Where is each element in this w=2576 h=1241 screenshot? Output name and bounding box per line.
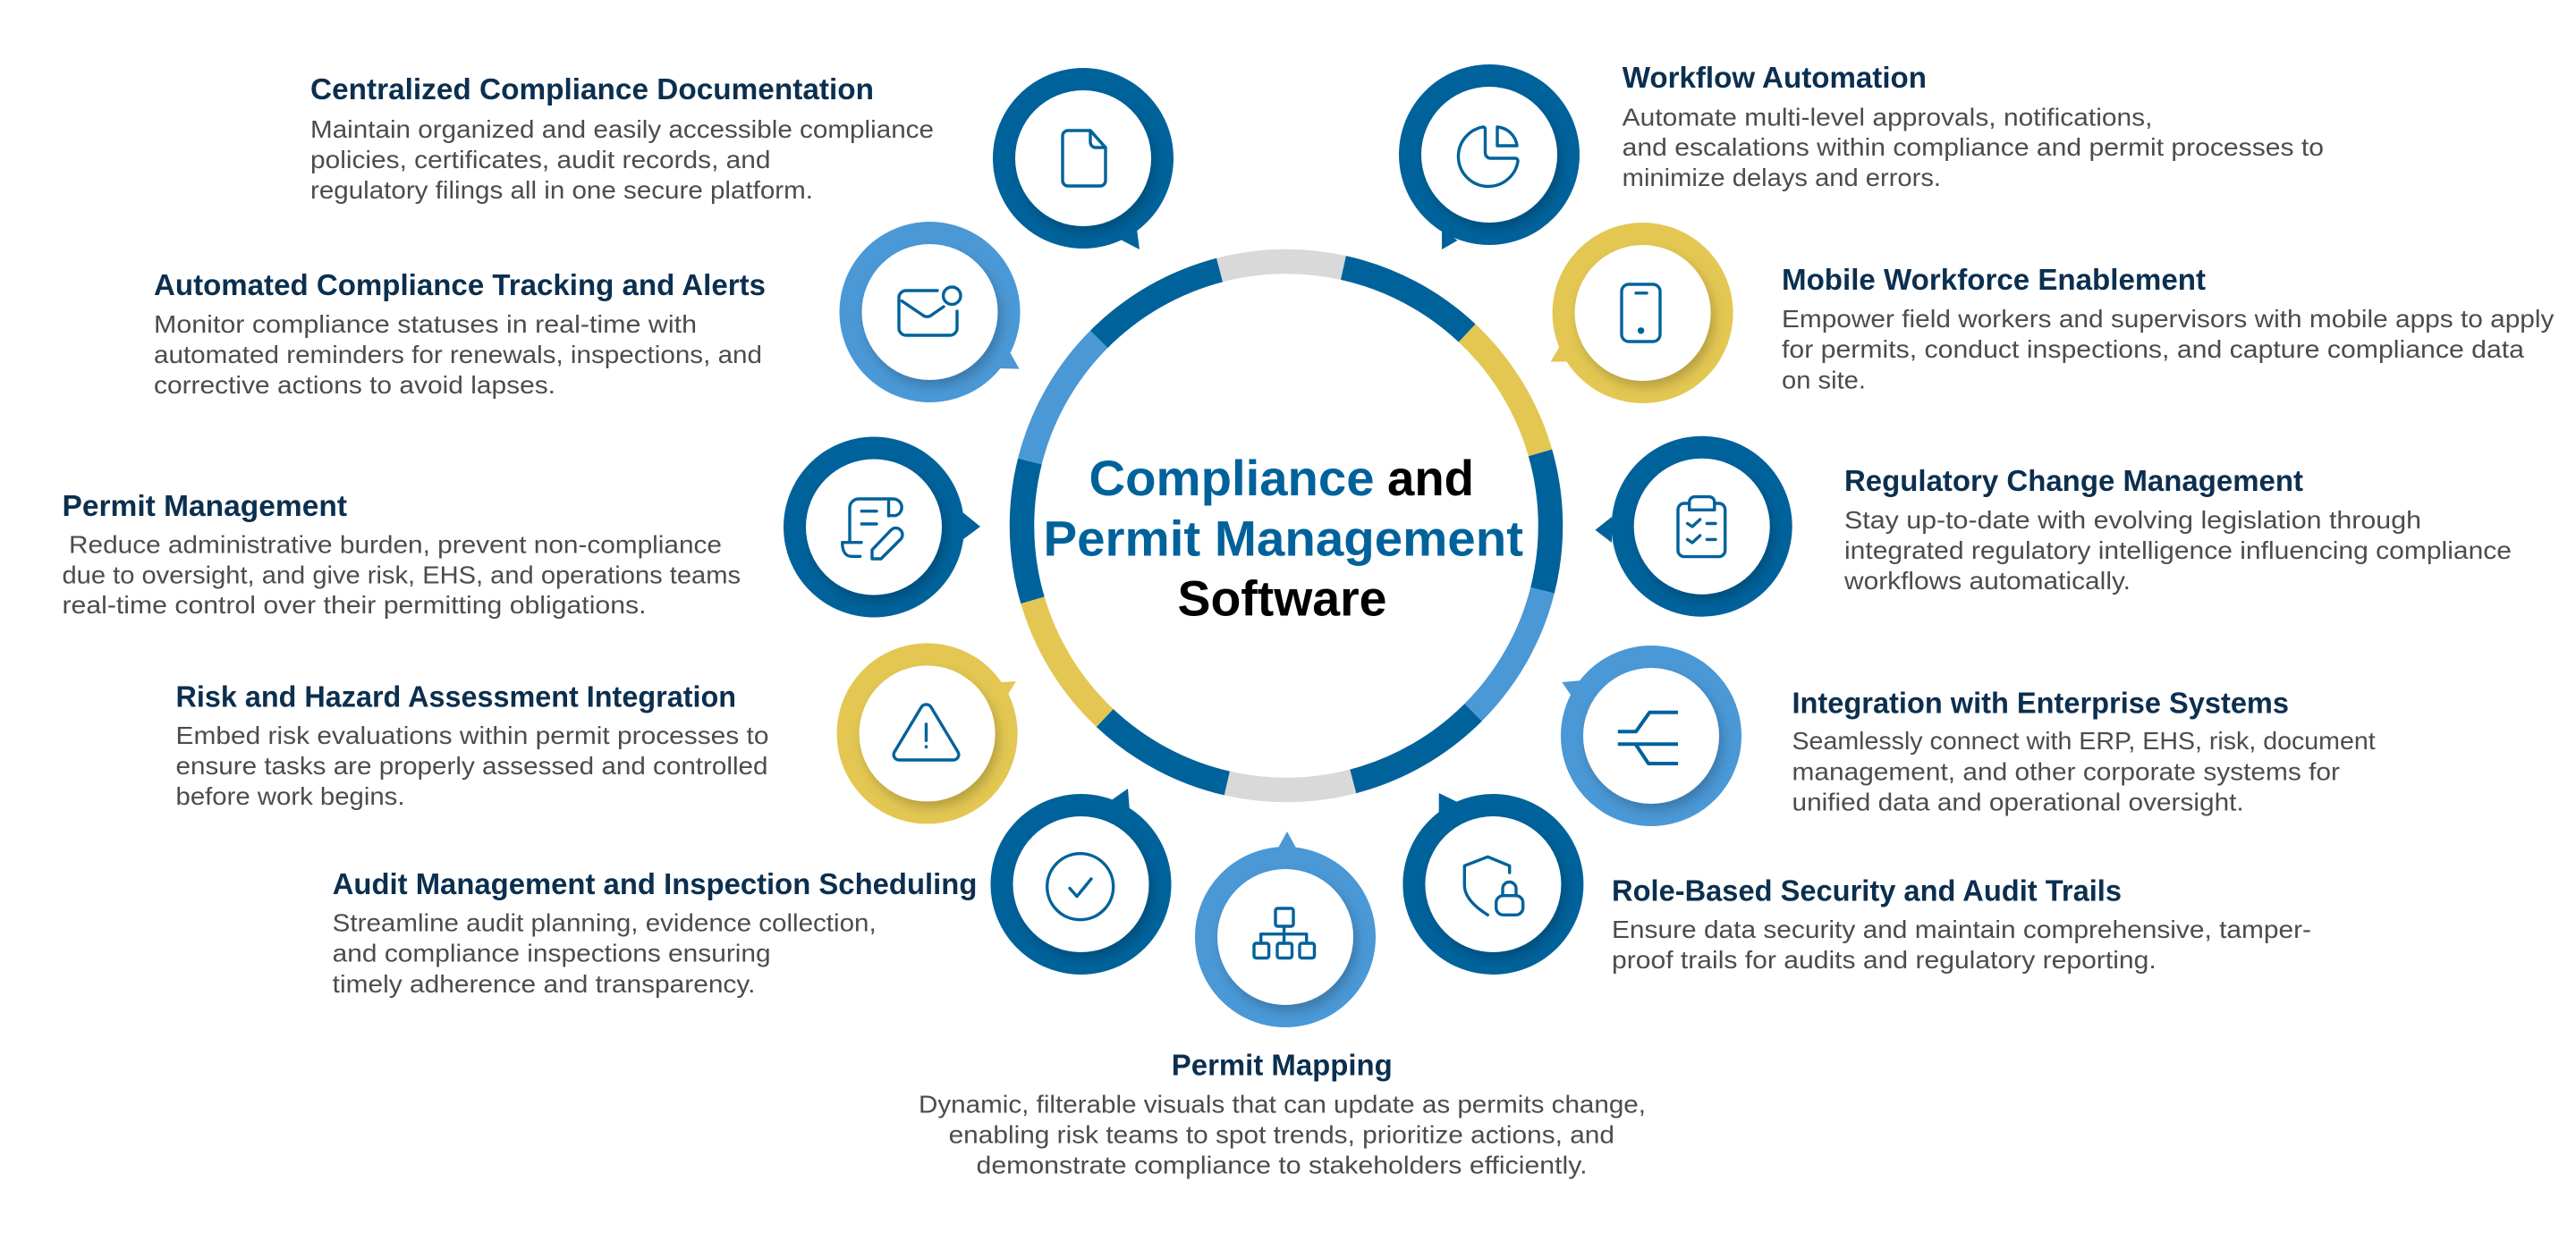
item: Automated Compliance Tracking and Alerts [154, 222, 1020, 402]
heading: Mobile Workforce Enablement [1782, 263, 2206, 296]
description: and escalations within compliance and permit processes to [1623, 133, 2324, 161]
title: and [1387, 450, 1474, 506]
description: regulatory filings all in one secure platform. [310, 176, 813, 204]
heading: Audit Management and Inspection Scheduling [333, 867, 977, 900]
description [154, 310, 762, 399]
description: Embed risk evaluations within permit processes to [175, 722, 769, 749]
icon: shield with lock [1464, 857, 1523, 915]
description [63, 531, 741, 619]
item: Risk and Hazard Assessment Integration [175, 643, 1018, 823]
icon: hierarchy [1254, 908, 1315, 958]
badge: clipboard [1596, 436, 1792, 617]
heading: Permit Management [63, 489, 347, 522]
heading: Integration with Enterprise Systems [1792, 686, 2289, 719]
title: Software [1177, 570, 1386, 626]
item: Regulatory Change Management [1596, 436, 2512, 617]
item: Permit Mapping [919, 832, 1646, 1178]
description: real-time control over their permitting obligations. [63, 591, 646, 619]
description: Reduce administrative burden, prevent non-compliance [69, 531, 722, 559]
description [175, 722, 769, 810]
description: Maintain organized and easily accessible compliance [310, 115, 934, 143]
item: Audit Management and Inspection Scheduling [333, 789, 1172, 998]
description: Dynamic, filterable visuals that can update as permits change, [919, 1090, 1646, 1118]
description: Ensure data security and maintain comprehensive, tamper- [1612, 916, 2311, 943]
heading: Risk and Hazard Assessment Integration [175, 680, 736, 713]
description: due to oversight, and give risk, EHS, and operations teams [63, 561, 741, 588]
description: corrective actions to avoid lapses. [154, 371, 555, 399]
item: Centralized Compliance Documentation [310, 68, 1174, 249]
item: Role-Based Security and Audit Trails [1402, 793, 2311, 975]
title [1043, 450, 1523, 626]
description: demonstrate compliance to stakeholders efficiently. [977, 1151, 1587, 1178]
badge: shield lock [1402, 793, 1583, 975]
badge: phone [1551, 223, 1733, 403]
icon: check circle [1047, 854, 1114, 920]
description: and compliance inspections ensuring [333, 940, 771, 967]
badge: pie chart [1399, 64, 1580, 249]
icon: integration lines [1618, 713, 1678, 764]
badge: permit scroll [784, 436, 980, 617]
item: Permit Management [63, 436, 980, 619]
title: Compliance [1089, 450, 1374, 506]
heading: Role-Based Security and Audit Trails [1612, 874, 2122, 908]
item: Mobile Workforce Enablement [1551, 223, 2555, 403]
description: Empower field workers and supervisors with mobile apps to apply [1782, 305, 2555, 333]
description: Streamline audit planning, evidence collection, [333, 909, 877, 937]
item: Integration with Enterprise Systems [1561, 646, 2376, 826]
description: Monitor compliance statuses in real-time with [154, 310, 697, 338]
description [1792, 727, 2376, 815]
icon: scroll and pencil [843, 499, 902, 559]
description: timely adherence and transparency. [333, 970, 755, 998]
description [1612, 916, 2311, 974]
description: for permits, conduct inspections, and capture compliance data [1782, 335, 2525, 363]
description: Seamlessly connect with ERP, EHS, risk, document [1792, 727, 2376, 755]
heading: Automated Compliance Tracking and Alerts [154, 268, 766, 301]
icon: mobile phone [1622, 284, 1660, 342]
icon: document [1063, 131, 1106, 186]
description: proof trails for audits and regulatory reporting. [1612, 946, 2157, 974]
central segmented ring [1021, 261, 1551, 790]
description [919, 1090, 1646, 1178]
icon: mail alert [899, 287, 961, 335]
description: Stay up-to-date with evolving legislation through [1844, 506, 2421, 534]
description [1623, 103, 2324, 191]
title: Permit Management [1043, 511, 1523, 567]
heading: Regulatory Change Management [1844, 464, 2303, 497]
description [1782, 305, 2555, 394]
description: automated reminders for renewals, inspections, and [154, 341, 762, 368]
description: workflows automatically. [1843, 567, 2131, 595]
description: before work begins. [175, 782, 404, 810]
badge: check [991, 789, 1172, 975]
heading: Centralized Compliance Documentation [310, 72, 874, 106]
icon: warning triangle [894, 705, 959, 760]
description [310, 115, 934, 204]
badge: document [993, 68, 1174, 249]
icon: clipboard checklist [1678, 497, 1725, 557]
badge: mail [839, 222, 1020, 402]
badge: warning [837, 643, 1018, 823]
heading: Workflow Automation [1623, 61, 1927, 94]
description: on site. [1782, 367, 1866, 394]
description [1843, 506, 2512, 595]
heading: Permit Mapping [1172, 1049, 1393, 1082]
description: management, and other corporate systems for [1792, 757, 2340, 785]
description: Automate multi-level approvals, notifications, [1623, 103, 2152, 131]
item: Workflow Automation [1399, 61, 2324, 249]
badge: integration [1561, 646, 1741, 826]
description: integrated regulatory intelligence influencing compliance [1844, 536, 2512, 564]
description: enabling risk teams to spot trends, prioritize actions, and [949, 1120, 1614, 1148]
description: ensure tasks are properly assessed and controlled [175, 752, 767, 780]
icon: pie chart [1458, 127, 1518, 186]
description: unified data and operational oversight. [1792, 788, 2244, 815]
description [333, 909, 877, 998]
badge: hierarchy [1195, 832, 1376, 1027]
description: policies, certificates, audit records, and [310, 146, 771, 173]
description: minimize delays and errors. [1623, 164, 1941, 191]
